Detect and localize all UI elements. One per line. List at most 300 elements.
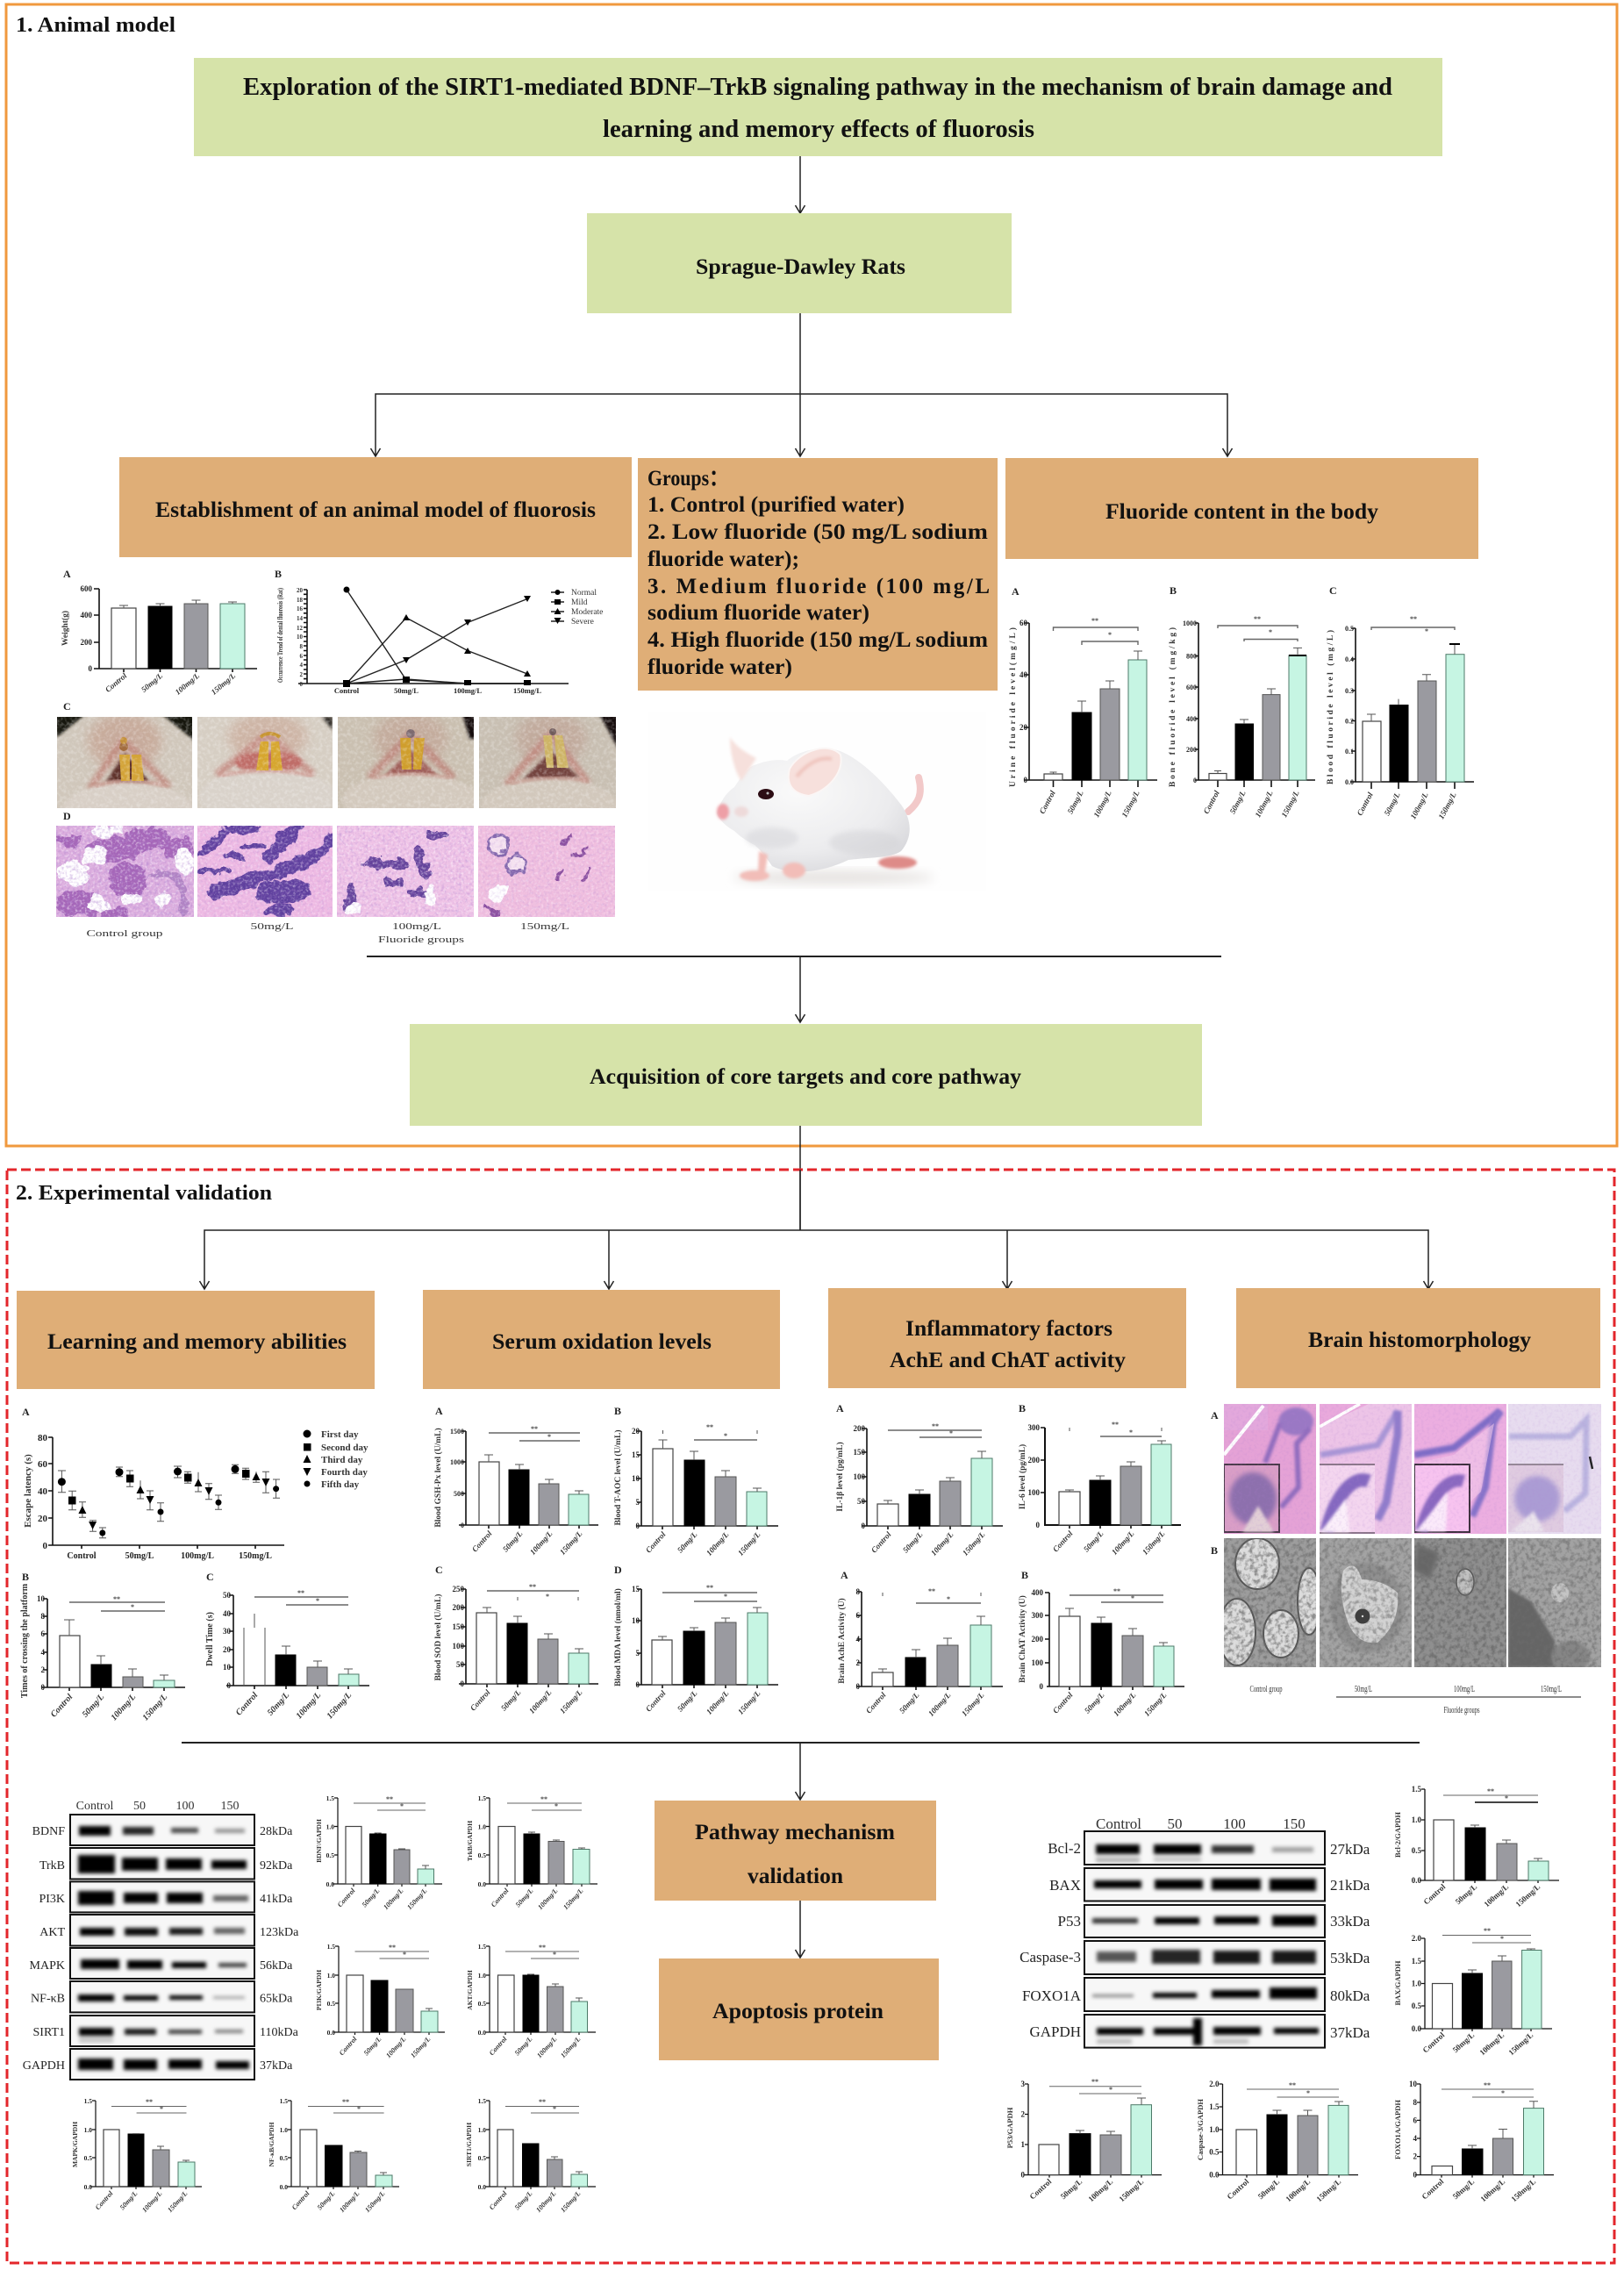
H&E: 50 mg/L xyxy=(1320,1404,1412,1534)
chart: MDA: 50mg/L xyxy=(676,1688,699,1714)
divider and arrow to core targets xyxy=(367,956,1221,957)
chart: BDNF/GAPDH: 1.5 xyxy=(326,1794,334,1802)
H&E: control xyxy=(1224,1404,1316,1534)
chart: crossing times: 150mg/L xyxy=(141,1693,169,1722)
chart B: dental fluorosis trend: 14 xyxy=(297,615,304,622)
chart: FOXO1A/GAPDH: 4 xyxy=(1413,2134,1418,2143)
chart: FOXO1A/GAPDH: 8 xyxy=(1413,2098,1418,2107)
chart: MDA xyxy=(613,1564,778,1716)
chart: MAPK/GAPDH: 0.0 xyxy=(84,2183,92,2191)
chart: bone fluoride: 1000 xyxy=(1183,619,1197,627)
legend xyxy=(551,589,603,627)
panel D: histology: D xyxy=(63,810,71,822)
chart: BAX/GAPDH: Control xyxy=(1420,2030,1447,2054)
blot row: MAPK xyxy=(30,1948,293,1979)
western blot: pathway proteins: 100 xyxy=(175,1800,195,1813)
chart: MDA: 10 xyxy=(632,1616,640,1625)
box: Groups: fluoride water) xyxy=(647,655,792,679)
blot row: P53: 33kDa xyxy=(1330,1913,1370,1930)
histology: control xyxy=(56,826,195,918)
box: Learning and memory abilities: Learning and memory abilities xyxy=(47,1330,347,1354)
chart: PI3K/GAPDH xyxy=(315,1943,445,2059)
chart: TrkB/GAPDH: 100mg/L xyxy=(536,1887,560,1911)
chart: MAPK/GAPDH: 1.0 xyxy=(84,2126,92,2134)
chart: NF-κB/GAPDH: 150mg/L xyxy=(363,2189,387,2214)
chart: T-AOC: 100mg/L xyxy=(705,1529,731,1557)
chart B: dental fluorosis trend: 100mg/L xyxy=(454,686,482,695)
chart B: dental fluorosis trend: 4 xyxy=(300,662,304,669)
blot row: MAPK: MAPK xyxy=(30,1959,65,1973)
blot row: P53: P53 xyxy=(1058,1913,1081,1930)
blot row: FOXO1A xyxy=(1022,1978,1370,2011)
chart: ChAT activity: Brain ChAT Activity (U) xyxy=(1018,1595,1027,1683)
chart: crossing times xyxy=(20,1571,185,1722)
chart: IL-1β: 100mg/L xyxy=(929,1529,955,1557)
chart: urine fluoride: A xyxy=(1012,585,1019,598)
chart: ChAT activity xyxy=(1018,1569,1184,1718)
chart: BDNF/GAPDH: BDNF/GAPDH xyxy=(315,1819,323,1863)
arrow: to core targets xyxy=(795,956,805,1022)
chart: blood fluoride: * xyxy=(1425,627,1428,635)
histology captions: 150mg/L xyxy=(520,921,569,932)
chart: SOD: Blood SOD level (U/mL) xyxy=(433,1594,443,1680)
chart: FOXO1A/GAPDH: 150mg/L xyxy=(1509,2177,1537,2203)
chart: IL-1β: 50 xyxy=(857,1497,865,1506)
chart: escape latency: 100mg/L xyxy=(181,1551,214,1561)
histology captions: Control group xyxy=(86,928,163,939)
body xyxy=(717,748,910,872)
chart: SOD: 0 xyxy=(460,1679,465,1688)
chart: crossing times: Times of crossing the platform xyxy=(20,1583,30,1698)
chart: bone fluoride: 150mg/L xyxy=(1279,789,1301,819)
box: Brain histomorphology: Brain histomorphology xyxy=(1308,1328,1532,1352)
chart: dwell time: 100mg/L xyxy=(295,1691,323,1721)
chart: IL-6: Control xyxy=(1051,1529,1075,1554)
chart: urine fluoride: Control xyxy=(1038,789,1057,815)
chart B: dental fluorosis trend: 20 xyxy=(297,587,304,594)
chart: Caspase-3/GAPDH xyxy=(1196,2080,1358,2203)
blot row: TrkB: 92kDa xyxy=(260,1859,293,1873)
chart B: dental fluorosis trend xyxy=(275,568,603,695)
box: Inflammatory factors: Inflammatory factors xyxy=(905,1317,1112,1341)
chart: FOXO1A/GAPDH: Control xyxy=(1420,2177,1446,2201)
chart: BAX/GAPDH: 50mg/L xyxy=(1451,2030,1476,2054)
chart: MAPK/GAPDH: ** xyxy=(146,2098,153,2106)
panel C: rat incisor photos xyxy=(57,704,616,808)
chart: escape latency: 50mg/L xyxy=(125,1551,154,1561)
box: Acquisition of core targets: Acquisition of core targets and core pathway xyxy=(590,1065,1022,1089)
chart: AchE activity: 150mg/L xyxy=(960,1690,986,1718)
EM: 50 mg/L xyxy=(1320,1538,1412,1667)
chart: GSH-Px: * xyxy=(547,1433,551,1441)
chart: crossing times: * xyxy=(131,1603,134,1611)
chart: FOXO1A/GAPDH: 100mg/L xyxy=(1478,2177,1506,2203)
chart: ChAT activity: 0 xyxy=(1039,1682,1044,1691)
chart: MDA: Blood MDA level (nmol/ml) xyxy=(613,1588,623,1686)
chart: SIRT1/GAPDH: * xyxy=(553,2105,556,2113)
chart: AchE activity: 4 xyxy=(856,1635,860,1643)
chart: SOD xyxy=(433,1564,598,1715)
chart: SOD: Control xyxy=(469,1687,492,1713)
chart: T-AOC: 20 xyxy=(632,1427,640,1436)
panel: brain histology H&E and EM: A xyxy=(1211,1409,1219,1421)
legend: days: Fourth day xyxy=(321,1467,368,1478)
chart: crossing times: 0 xyxy=(40,1683,46,1692)
chart: ChAT activity: 100 xyxy=(1032,1658,1044,1667)
chart: PI3K/GAPDH: 50mg/L xyxy=(362,2035,383,2057)
chart: MDA: D xyxy=(614,1564,622,1576)
chart: urine fluoride xyxy=(1008,585,1157,819)
chart: AKT/GAPDH: 100mg/L xyxy=(535,2035,559,2059)
chart: blood fluoride: Control xyxy=(1356,791,1375,817)
box: Learning and memory abilities xyxy=(17,1291,375,1389)
chart: MDA: 5 xyxy=(635,1649,640,1658)
chart A: body weight: 400 xyxy=(81,611,93,619)
chart: T-AOC: B xyxy=(614,1405,621,1417)
box: Pathway mechanism validation: Pathway mechanism xyxy=(695,1821,895,1844)
blot row: NF-κB xyxy=(31,1981,293,2012)
histology: 100 mg/L xyxy=(337,826,474,917)
chart: BAX/GAPDH xyxy=(1393,1927,1552,2057)
chart: IL-6 xyxy=(1018,1402,1181,1557)
chart: BDNF/GAPDH: 100mg/L xyxy=(382,1887,405,1911)
chart: MAPK/GAPDH: 50mg/L xyxy=(118,2189,140,2211)
chart: dwell time: 20 xyxy=(223,1645,232,1654)
chart: ChAT activity: 300 xyxy=(1032,1611,1044,1620)
hind foot xyxy=(878,856,917,869)
chart: BAX/GAPDH: ** xyxy=(1484,1927,1491,1935)
chart: BDNF/GAPDH: 150mg/L xyxy=(405,1887,429,1911)
chart: SOD: C xyxy=(435,1564,443,1576)
chart: Caspase-3/GAPDH: 1.5 xyxy=(1209,2102,1220,2111)
chart: SOD: 150mg/L xyxy=(558,1687,584,1715)
brain captions: 100mg/L xyxy=(1454,1684,1475,1694)
chart: T-AOC xyxy=(613,1405,778,1557)
chart: ChAT activity: * xyxy=(1131,1594,1134,1602)
chart: urine fluoride: 50mg/L xyxy=(1066,789,1085,815)
chart: T-AOC: ** xyxy=(706,1423,713,1431)
chart: BDNF/GAPDH: * xyxy=(400,1802,404,1810)
chart: Bcl-2/GAPDH: 150mg/L xyxy=(1513,1882,1542,1908)
legend: days xyxy=(304,1429,368,1490)
H&E: 150 mg/L xyxy=(1508,1404,1601,1534)
chart: TrkB/GAPDH: 0.5 xyxy=(478,1851,486,1859)
chart: P53/GAPDH: 3 xyxy=(1021,2080,1025,2088)
box: Groups: 2. Low fluoride (50 mg/L sodium xyxy=(647,520,988,544)
chart: Caspase-3/GAPDH: 0.0 xyxy=(1209,2171,1220,2180)
arrows: branching to three boxes xyxy=(370,313,1232,456)
arrow: title to rats xyxy=(795,156,805,213)
chart: AKT/GAPDH: 150mg/L xyxy=(559,2035,583,2059)
box: Apoptosis protein: Apoptosis protein xyxy=(712,2000,884,2023)
chart: SIRT1/GAPDH: 1.0 xyxy=(478,2126,486,2134)
histology: 50 mg/L xyxy=(197,826,333,917)
chart: P53/GAPDH: 100mg/L xyxy=(1086,2177,1114,2203)
EM: 100 mg/L xyxy=(1414,1538,1506,1667)
chart: GSH-Px: 1500 xyxy=(450,1428,464,1436)
chart: IL-1β: 100 xyxy=(853,1472,865,1481)
chart: BAX/GAPDH: 0.5 xyxy=(1412,2001,1421,2010)
blot row: Caspase-3: Caspase-3 xyxy=(1019,1949,1081,1966)
chart: MDA: * xyxy=(724,1593,727,1600)
blot row: FOXO1A: 80kDa xyxy=(1330,1987,1370,2004)
chart: dwell time: 10 xyxy=(223,1663,232,1672)
chart: AchE activity: A xyxy=(841,1569,848,1581)
blot row: BAX xyxy=(1049,1868,1370,1901)
chart: P53/GAPDH xyxy=(1005,2078,1162,2203)
blot row: GAPDH xyxy=(1029,2015,1370,2048)
chart: Caspase-3/GAPDH: 150mg/L xyxy=(1314,2177,1342,2203)
legend: days: Fifth day xyxy=(321,1479,360,1490)
blot row: SIRT1 xyxy=(33,2016,299,2046)
chart: T-AOC: 15 xyxy=(632,1450,640,1459)
chart: escape latency: Escape latency (s) xyxy=(23,1454,33,1528)
chart: MAPK/GAPDH: 100mg/L xyxy=(140,2189,164,2214)
box: Fluoride content in the body xyxy=(1005,458,1478,559)
blot row: Bcl-2 xyxy=(1048,1831,1370,1865)
chart: SIRT1/GAPDH: 100mg/L xyxy=(534,2189,558,2214)
arrows: branching to four boxes xyxy=(200,1170,1434,1289)
photo: control teeth xyxy=(57,717,192,808)
box: Fluoride content in the body: Fluoride content in the body xyxy=(1105,500,1379,524)
chart: AchE activity: 8 xyxy=(856,1587,860,1596)
chart: dwell time xyxy=(205,1571,369,1721)
western blot: pathway proteins: Control xyxy=(76,1800,113,1813)
panel D: histology xyxy=(56,810,615,945)
chart: escape latency: 0 xyxy=(42,1541,47,1551)
chart: SIRT1/GAPDH: 0.5 xyxy=(478,2154,486,2162)
chart: AKT/GAPDH: Control xyxy=(488,2035,509,2057)
panel C: rat incisor photos: C xyxy=(63,700,71,713)
chart: SIRT1/GAPDH xyxy=(465,2097,596,2214)
blot row: NF-κB: NF-κB xyxy=(31,1992,65,2006)
chart: FOXO1A/GAPDH: 6 xyxy=(1413,2116,1418,2124)
chart A: body weight: 150mg/L xyxy=(210,671,238,697)
box: Sprague-Dawley Rats: Sprague-Dawley Rats xyxy=(696,255,905,279)
box: Groups: fluoride water); xyxy=(647,548,799,571)
chart: urine fluoride: 20 xyxy=(1019,723,1028,732)
chart: blood fluoride: C xyxy=(1329,584,1337,597)
chart: MDA: 150mg/L xyxy=(736,1688,762,1716)
chart: Caspase-3/GAPDH: Caspase-3/GAPDH xyxy=(1196,2099,1205,2160)
chart B: dental fluorosis trend: Control xyxy=(334,686,360,695)
data markers xyxy=(58,1465,279,1536)
chart: bone fluoride: 800 xyxy=(1186,653,1197,661)
chart: ChAT activity: ** xyxy=(1113,1587,1120,1595)
chart: IL-1β: 0 xyxy=(862,1522,865,1530)
blot row: BDNF: 28kDa xyxy=(260,1825,293,1838)
chart: P53/GAPDH: 150mg/L xyxy=(1117,2177,1145,2203)
chart: IL-6: 100mg/L xyxy=(1110,1529,1136,1557)
chart: SIRT1/GAPDH: 150mg/L xyxy=(559,2189,583,2214)
chart: SOD: 50 xyxy=(456,1660,465,1669)
chart: PI3K/GAPDH: 1.0 xyxy=(327,1972,335,1980)
chart: NF-κB/GAPDH: 1.0 xyxy=(280,2126,288,2134)
chart A: body weight: 200 xyxy=(81,638,93,647)
chart: AchE activity: 2 xyxy=(856,1658,860,1667)
chart: SOD: * xyxy=(546,1593,549,1600)
brain captions: Control group xyxy=(1249,1684,1283,1694)
western blot: apoptosis proteins: 50 xyxy=(1167,1815,1183,1832)
chart: bone fluoride xyxy=(1168,584,1315,819)
chart: AKT/GAPDH: 1.0 xyxy=(478,1972,486,1980)
blot row: GAPDH: 37kDa xyxy=(260,2059,293,2073)
chart: SIRT1/GAPDH: 0.0 xyxy=(478,2183,486,2191)
chart: T-AOC: 5 xyxy=(635,1498,640,1507)
chart: SOD: 100 xyxy=(453,1642,465,1651)
chart: BDNF/GAPDH: ** xyxy=(386,1795,393,1803)
chart: Bcl-2/GAPDH: 1.5 xyxy=(1412,1785,1421,1794)
chart: AKT/GAPDH: AKT/GAPDH xyxy=(466,1970,474,2010)
chart: AKT/GAPDH: 1.5 xyxy=(478,1943,486,1951)
chart: Caspase-3/GAPDH: 0.5 xyxy=(1209,2148,1220,2157)
chart: ChAT activity: 50mg/L xyxy=(1083,1690,1106,1715)
connector: core targets to validation xyxy=(799,1126,801,1230)
box: Pathway mechanism validation: validation xyxy=(748,1865,843,1888)
chart: MAPK/GAPDH: * xyxy=(160,2105,163,2113)
chart: NF-κB/GAPDH: 50mg/L xyxy=(316,2189,337,2211)
chart: crossing times: Control xyxy=(49,1692,75,1720)
chart: GSH-Px: ** xyxy=(531,1425,538,1433)
legend: Severe xyxy=(571,618,594,627)
chart: SOD: 250 xyxy=(453,1585,465,1593)
blot row: BAX: 21kDa xyxy=(1330,1877,1370,1894)
chart B: dental fluorosis trend: 18 xyxy=(297,597,304,604)
chart: blood fluoride: 0.0 xyxy=(1345,778,1354,786)
chart: escape latency: 80 xyxy=(38,1433,47,1443)
chart: SOD: 150 xyxy=(453,1622,465,1631)
chart: dwell time: 30 xyxy=(223,1627,232,1636)
chart: GSH-Px: 500 xyxy=(454,1490,464,1498)
chart: urine fluoride: 0 xyxy=(1023,776,1028,784)
blot row: AKT xyxy=(39,1915,299,1946)
chart: urine fluoride: Urine fluoride level(mg/L) xyxy=(1008,627,1018,787)
chart: blood fluoride: 0.2 xyxy=(1345,718,1354,725)
chart: T-AOC: 10 xyxy=(632,1474,640,1483)
blot row: MAPK: 56kDa xyxy=(260,1959,293,1973)
box: Groups: 4. High fluoride (150 mg/L sodium xyxy=(647,628,988,652)
chart: bone fluoride: Control xyxy=(1202,789,1221,815)
chart: BAX/GAPDH: 1.5 xyxy=(1412,1957,1421,1966)
chart: T-AOC: Blood T-AOC level (U/mL) xyxy=(613,1430,623,1525)
chart: TrkB/GAPDH: 1.5 xyxy=(478,1794,486,1802)
chart: SIRT1/GAPDH: 50mg/L xyxy=(513,2189,534,2211)
chart A: body weight: 100mg/L xyxy=(174,671,202,697)
chart: crossing times: 10 xyxy=(37,1594,46,1603)
panel: brain histology H&E and EM xyxy=(1211,1404,1601,1715)
chart: SIRT1/GAPDH: Control xyxy=(488,2189,509,2211)
western blot: pathway proteins: 150 xyxy=(221,1800,239,1813)
chart: AchE activity: 100mg/L xyxy=(926,1690,953,1718)
chart A: body weight: 600 xyxy=(81,584,93,593)
heading: 1. Animal model: 1. Animal model xyxy=(16,14,175,37)
chart: Caspase-3/GAPDH: 100mg/L xyxy=(1284,2177,1312,2203)
chart: TrkB/GAPDH: 50mg/L xyxy=(514,1887,535,1908)
blot row: Caspase-3: 53kDa xyxy=(1330,1950,1370,1966)
chart: IL-6: ** xyxy=(1112,1421,1119,1429)
chart: NF-κB/GAPDH xyxy=(268,2097,399,2214)
chart: PI3K/GAPDH: 1.5 xyxy=(327,1943,335,1951)
chart: AchE activity: 6 xyxy=(856,1611,860,1620)
chart: bone fluoride: 400 xyxy=(1186,715,1197,723)
chart B: dental fluorosis trend: Occurrence Trend of dental fluorosis (Rat) xyxy=(276,588,284,683)
chart B: dental fluorosis trend: 6 xyxy=(300,653,304,660)
box: Apoptosis protein xyxy=(659,1959,939,2060)
legend: Moderate xyxy=(571,608,603,617)
chart: bone fluoride: 600 xyxy=(1186,684,1197,691)
blot row: Bcl-2: Bcl-2 xyxy=(1048,1840,1081,1857)
chart: AKT/GAPDH: 0.5 xyxy=(478,2000,486,2008)
chart: IL-6: 300 xyxy=(1028,1423,1041,1432)
blot row: SIRT1: 110kDa xyxy=(260,2026,299,2039)
chart: P53/GAPDH: * xyxy=(1109,2086,1112,2094)
chart: NF-κB/GAPDH: Control xyxy=(290,2189,311,2211)
chart: Caspase-3/GAPDH: 50mg/L xyxy=(1256,2177,1281,2201)
chart: AchE activity xyxy=(837,1569,1003,1718)
chart: BAX/GAPDH: 1.0 xyxy=(1412,1980,1421,1988)
front feet xyxy=(740,851,805,881)
chart: MDA: 100mg/L xyxy=(705,1688,731,1716)
H&E: 100 mg/L xyxy=(1414,1404,1506,1534)
chart: Caspase-3/GAPDH: 1.0 xyxy=(1209,2125,1220,2134)
western blot: pathway proteins: 50 xyxy=(133,1800,146,1813)
chart: ChAT activity: 400 xyxy=(1032,1588,1044,1597)
chart: MAPK/GAPDH: 150mg/L xyxy=(166,2189,190,2214)
chart: NF-κB/GAPDH: ** xyxy=(342,2098,349,2106)
chart: FOXO1A/GAPDH: ** xyxy=(1484,2081,1491,2089)
chart: PI3K/GAPDH: 0.5 xyxy=(327,2000,335,2008)
chart: ChAT activity: B xyxy=(1021,1569,1028,1581)
chart: SIRT1/GAPDH: 1.5 xyxy=(478,2097,486,2105)
chart: dwell time: Dwell Time (s) xyxy=(205,1612,215,1666)
chart: MDA: ** xyxy=(706,1584,713,1592)
chart: NF-κB/GAPDH: NF-κB/GAPDH xyxy=(268,2122,275,2166)
chart: blood fluoride: 0.4 xyxy=(1345,655,1354,663)
chart B: dental fluorosis trend: 16 xyxy=(297,605,304,612)
chart: IL-6: IL-6 level (pg/mL) xyxy=(1018,1444,1027,1509)
chart: P53/GAPDH: 1 xyxy=(1021,2140,1025,2149)
chart: NF-κB/GAPDH: 0.5 xyxy=(280,2154,288,2162)
chart: MDA: Control xyxy=(644,1688,668,1714)
chart: dwell time: 50mg/L xyxy=(266,1691,291,1718)
chart: BAX/GAPDH: * xyxy=(1500,1935,1504,1943)
chart: blood fluoride: 150mg/L xyxy=(1436,791,1458,820)
chart: escape latency xyxy=(22,1406,368,1561)
chart: P53/GAPDH: 50mg/L xyxy=(1059,2177,1084,2201)
brain captions: 50mg/L xyxy=(1355,1684,1372,1694)
chart: urine fluoride: 40 xyxy=(1019,670,1028,679)
chart: crossing times: B xyxy=(22,1571,29,1583)
chart: crossing times: 2 xyxy=(40,1665,46,1674)
chart: blood fluoride: 100mg/L xyxy=(1408,791,1430,820)
chart: BAX/GAPDH: 100mg/L xyxy=(1477,2030,1506,2057)
chart: crossing times: ** xyxy=(113,1595,120,1603)
chart: IL-1β: 150mg/L xyxy=(961,1529,987,1557)
chart A: body weight: A xyxy=(63,568,71,580)
chart: dwell time: 40 xyxy=(223,1609,232,1618)
box: Inflammatory factors: AchE and ChAT activity xyxy=(890,1349,1127,1372)
blot row: BAX: BAX xyxy=(1049,1877,1081,1894)
chart: blood fluoride: 0.3 xyxy=(1345,687,1354,695)
chart: NF-κB/GAPDH: 0.0 xyxy=(280,2183,288,2191)
chart: IL-6: 100 xyxy=(1028,1488,1041,1497)
chart: P53/GAPDH: Control xyxy=(1027,2177,1054,2201)
chart: NF-κB/GAPDH: * xyxy=(357,2105,361,2113)
chart: TrkB/GAPDH: * xyxy=(554,1802,558,1810)
chart: TrkB/GAPDH xyxy=(466,1794,597,1911)
chart: T-AOC: 0 xyxy=(635,1522,640,1530)
blot row: TrkB xyxy=(39,1848,293,1880)
